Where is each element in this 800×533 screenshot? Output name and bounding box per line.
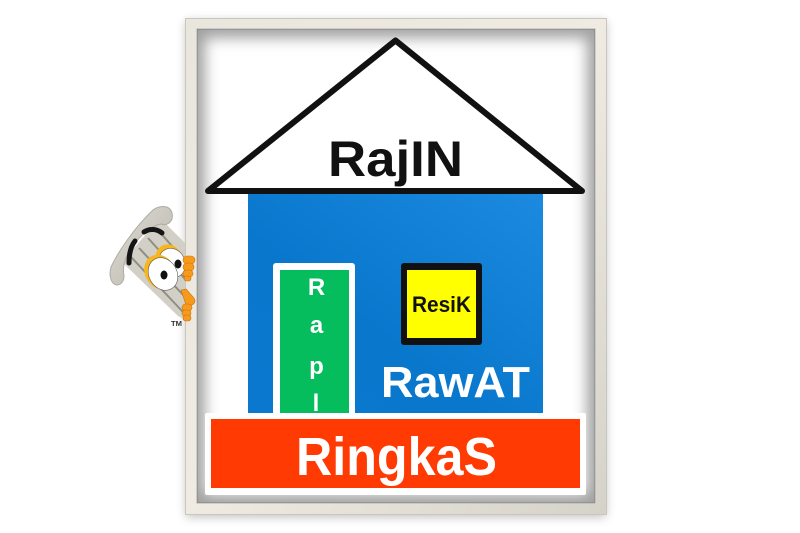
icon: column capital (110, 207, 172, 285)
mascot: peeking column character (110, 207, 195, 328)
text: Rapl vertical letters: l (313, 390, 319, 417)
icon: column body (124, 224, 185, 318)
text: Rapl vertical letters (308, 274, 325, 417)
icon: lower hand (181, 289, 195, 321)
infographic canvas (110, 16, 612, 522)
panel: RingkaS foundation (205, 413, 586, 495)
heading: RingkaS: RingkaS (296, 427, 497, 487)
text: Rapl vertical letters: R (308, 274, 325, 301)
heading: RawAT: RawAT (381, 358, 530, 407)
panel: Rapl column (273, 263, 355, 417)
trademark mark: TM (171, 319, 182, 328)
panel: house body (244, 190, 547, 416)
label: ResiK: ResiK (412, 292, 471, 317)
panel: ResiK box (401, 263, 482, 345)
icon: right eye (151, 240, 190, 282)
icon: eyebrows (129, 229, 162, 263)
heading: RajIN: RajIN (328, 131, 463, 187)
text: Rapl vertical letters: p (309, 353, 324, 380)
icon: upper hand (183, 256, 195, 281)
picture frame (170, 5, 622, 527)
text: Rapl vertical letters: a (310, 312, 324, 339)
icon: left eye (138, 249, 184, 296)
panel: roof RajIN (208, 40, 582, 191)
house (205, 40, 586, 495)
